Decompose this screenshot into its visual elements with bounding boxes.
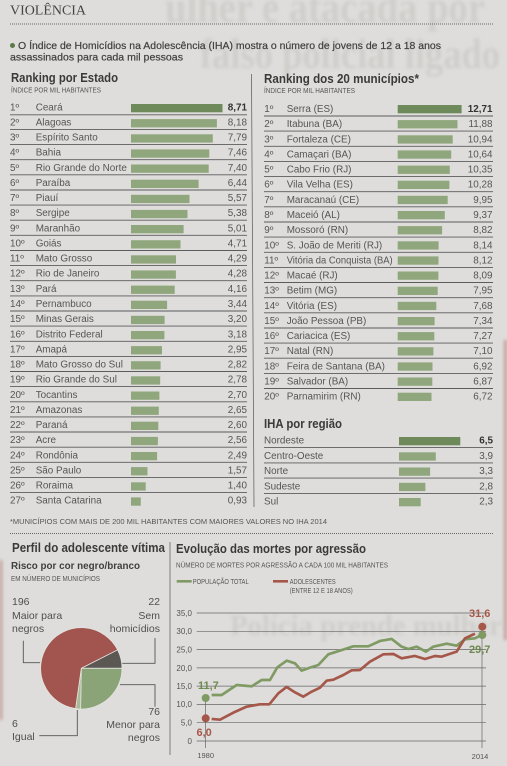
marker: 2014 população 29,7 xyxy=(469,631,490,656)
row: Amazonas: Amazonas xyxy=(36,405,82,416)
row: Distrito Federal: 3,18 xyxy=(228,329,247,340)
row: Roraima: 26º xyxy=(10,481,25,492)
subheading: índice por mil habitantes: ÍNDICE POR MIL HABITANTES xyxy=(264,86,355,95)
row: Espírito Santo: 3º xyxy=(10,133,19,144)
row: Betim: 13º xyxy=(264,286,279,297)
row: Nordeste: Nordeste xyxy=(264,436,305,447)
row: S. João de Meriti: 8,14 xyxy=(473,240,493,251)
row: Paraná xyxy=(10,420,247,432)
row: Fortaleza: 3º xyxy=(264,134,274,145)
row: Norte xyxy=(264,466,494,478)
row: Natal: Natal (RN) xyxy=(287,346,333,357)
row: Centro-Oeste xyxy=(264,451,494,463)
row: Rondônia: Rondônia xyxy=(36,450,78,461)
row: Ceará: Ceará xyxy=(36,102,63,113)
row: Feira de Santana: 6,92 xyxy=(473,361,492,372)
row: Acre xyxy=(10,435,247,447)
panel: evolução das mortes por agressão xyxy=(176,542,490,761)
row: Cabo Frio: 5º xyxy=(264,165,274,176)
row: Goiás xyxy=(10,238,247,250)
callout: 22 sem homicídios: homicídios xyxy=(110,623,160,635)
row: Vitória da Conquista xyxy=(264,255,493,267)
y axis labels: 30,0 xyxy=(176,627,193,636)
row: Centro-Oeste: 3,9 xyxy=(479,451,494,462)
row: Ceará xyxy=(10,102,247,115)
x axis labels: 1980 xyxy=(197,751,214,760)
row: São Paulo: 1,57 xyxy=(228,465,247,476)
intro text: assassinados para cada mil pessoas xyxy=(10,52,183,64)
x axis labels: 2014 xyxy=(472,752,488,761)
callout: 22 sem homicídios: Sem xyxy=(138,610,160,622)
row: Pará: 4,16 xyxy=(228,284,247,295)
row: S. João de Meriti: 10º xyxy=(264,240,279,251)
row: Sul: 2,3 xyxy=(479,497,494,508)
row: Itabuna: 11,88 xyxy=(469,119,493,130)
callout: 196 maior para negros: Maior para xyxy=(12,610,62,622)
callout: 6 igual: 6 xyxy=(12,718,18,730)
row: Amapá: 2,95 xyxy=(228,344,247,355)
row: Amapá: 17º xyxy=(10,344,25,355)
row: Ceará: 1º xyxy=(10,102,19,113)
row: Acre: Acre xyxy=(36,435,57,446)
row: Distrito Federal: Distrito Federal xyxy=(36,329,103,340)
row: Sergipe: 5,38 xyxy=(228,208,247,219)
row: Macaé: 12º xyxy=(264,270,279,282)
row: São Paulo xyxy=(10,465,247,477)
row: Rio Grande do Norte: 7,40 xyxy=(228,163,247,174)
marker: 2014 população 29,7: 29,7 xyxy=(469,644,490,656)
row: Bahia xyxy=(10,148,247,160)
row: Itabuna: Itabuna (BA) xyxy=(287,119,342,130)
row: Betim: 7,95 xyxy=(473,286,493,297)
heading: ranking por estado: Ranking por Estado xyxy=(11,71,118,85)
legend: (ENTRE 12 E 18 ANOS) xyxy=(290,588,353,595)
row: Cabo Frio xyxy=(264,165,493,177)
row: Macaé xyxy=(264,270,493,282)
row: Maracanaú: 9,95 xyxy=(473,195,493,206)
legend: ADOLESCENTES xyxy=(290,579,336,586)
row: Amazonas: 21º xyxy=(10,405,25,416)
row: Sergipe xyxy=(10,208,247,220)
row: Natal: 7,10 xyxy=(473,346,493,357)
row: Salvador: 19º xyxy=(264,376,279,388)
heading: IHA por região: IHA por região xyxy=(264,417,342,431)
text: Polícia prende mulher xyxy=(230,609,502,642)
row: Piauí: Piauí xyxy=(36,193,58,204)
row: Tocantins: Tocantins xyxy=(36,390,77,401)
row: Betim: Betim (MG) xyxy=(287,286,337,297)
callout: 196 maior para negros: negros xyxy=(12,623,44,635)
row: Alagoas: Alagoas xyxy=(36,117,71,128)
row: Amapá: Amapá xyxy=(36,344,67,355)
row: Rio Grande do Sul: 19º xyxy=(10,375,25,386)
row: Santa Catarina: 27º xyxy=(10,496,25,507)
row: Paraíba: 6º xyxy=(10,178,19,189)
row: São Paulo: 25º xyxy=(10,465,25,476)
line chart xyxy=(176,608,490,761)
marker: 1980 população 11,7 xyxy=(198,680,219,702)
row: Rio Grande do Sul: 2,78 xyxy=(228,375,247,386)
row: Pará: Pará xyxy=(36,284,57,295)
row: Vitória: 14º xyxy=(264,301,279,312)
title: VIOLÊNCIA xyxy=(10,2,87,18)
row: Pernambuco xyxy=(10,299,247,311)
row: Parnamirim xyxy=(264,392,492,403)
y axis labels: 0 xyxy=(188,737,193,746)
row: Roraima: Roraima xyxy=(36,481,74,492)
row: Rio de Janeiro: Rio de Janeiro xyxy=(36,269,100,280)
footnote: *MUNICÍPIOS COM MAIS DE 200 MIL HABITANTES COM MAIORES VALORES NO IHA 2014 xyxy=(10,517,327,526)
row: Pará: 13º xyxy=(10,284,25,295)
row: Maceió: 9,37 xyxy=(473,210,492,221)
row: Mato Grosso: Mato Grosso xyxy=(36,254,93,265)
row: Distrito Federal xyxy=(10,329,247,341)
row: Pernambuco: 3,44 xyxy=(228,299,247,310)
marker: 1980 adolescentes 6,0: 6,0 xyxy=(196,727,212,739)
row: Camaçari: 10,64 xyxy=(468,149,493,160)
row: Norte: Norte xyxy=(264,466,289,477)
row: Santa Catarina: Santa Catarina xyxy=(36,496,102,507)
x axis labels xyxy=(197,751,488,761)
row: Parnamirim: 20º xyxy=(264,392,279,403)
row: Vila Velha: 10,28 xyxy=(468,180,493,191)
row: Fortaleza: 10,94 xyxy=(468,134,493,145)
y axis labels: 35,0 xyxy=(176,609,193,618)
subheading: risco por cor: Risco por cor negro/branco xyxy=(11,560,140,572)
row: Parnamirim: 6,72 xyxy=(473,392,492,403)
callout: 76 menor para negros: 76 xyxy=(148,706,160,718)
y axis labels: 20,0 xyxy=(176,664,193,673)
row: Serra: 1º xyxy=(264,104,274,115)
row: Paraná: 22º xyxy=(10,420,25,431)
row: Paraíba: Paraíba xyxy=(36,178,71,189)
row: Maranhão: 9º xyxy=(10,223,19,234)
row: Maceió xyxy=(264,210,493,222)
row: Santa Catarina: 0,93 xyxy=(228,496,247,507)
row: Acre: 2,56 xyxy=(228,435,247,446)
row: Rio Grande do Sul xyxy=(10,375,247,387)
row: Cabo Frio: Cabo Frio (RJ) xyxy=(287,165,351,176)
unit note: EM NÚMERO DE MUNICÍPIOS xyxy=(11,574,100,583)
row: Maranhão: 5,01 xyxy=(228,223,247,234)
row: Itabuna: 2º xyxy=(264,119,274,130)
callout: 76 menor para negros: negros xyxy=(128,732,160,744)
row: Roraima: 1,40 xyxy=(228,481,247,492)
row: Nordeste: 6,5 xyxy=(479,436,494,447)
intro text xyxy=(10,39,441,64)
row: Sudeste: Sudeste xyxy=(264,481,301,492)
row: Salvador: Salvador (BA) xyxy=(287,376,348,388)
row: Paraíba xyxy=(10,178,247,190)
row: Minas Gerais: Minas Gerais xyxy=(36,314,94,325)
line: população total xyxy=(212,635,482,695)
row: Serra xyxy=(264,104,493,116)
subheading: índice por mil habitantes: ÍNDICE POR MIL HABITANTES xyxy=(11,86,101,94)
row: Cariacica: 16º xyxy=(264,331,279,342)
row: Bahia: 7,46 xyxy=(228,148,247,159)
row: Sul xyxy=(264,497,494,508)
row: Espírito Santo: 7,79 xyxy=(228,133,247,144)
row: Feira de Santana: Feira de Santana (BA) xyxy=(287,361,385,372)
row: João Pessoa: 7,34 xyxy=(473,316,493,327)
row: Goiás: 10º xyxy=(10,238,25,250)
row: Camaçari: Camaçari (BA) xyxy=(287,149,351,160)
row: Cariacica: 7,27 xyxy=(473,331,492,342)
row: Piauí xyxy=(10,193,247,205)
row: Roraima xyxy=(10,481,247,493)
row: João Pessoa xyxy=(264,316,493,328)
y axis labels: 5,0 xyxy=(181,718,193,728)
panel: ranking dos 20 municípios xyxy=(264,72,493,403)
row: Macaé: Macaé (RJ) xyxy=(287,270,338,282)
y axis labels: 10,0 xyxy=(176,700,193,709)
row: Rio de Janeiro: 12º xyxy=(10,269,25,280)
row: Maracanaú: Maracanaú (CE) xyxy=(287,195,359,206)
row: Mato Grosso: 11º xyxy=(10,254,24,265)
heading: perfil do adolescente vítima: Perfil do adolescente vítima xyxy=(12,541,166,555)
row: Tocantins: 2,70 xyxy=(228,390,247,401)
row: Alagoas: 8,18 xyxy=(228,117,247,128)
row: Vitória: 7,68 xyxy=(473,301,493,312)
row: Rio Grande do Norte: Rio Grande do Norte xyxy=(36,163,127,174)
row: Minas Gerais: 3,20 xyxy=(228,314,247,325)
marker: 2014 adolescentes 31,6 xyxy=(469,608,490,631)
legend xyxy=(177,577,353,595)
row: Santa Catarina xyxy=(10,496,247,507)
row: Piauí: 5,57 xyxy=(228,193,247,204)
row: Mato Grosso do Sul: Mato Grosso do Sul xyxy=(36,360,123,370)
callout: 22 sem homicídios: 22 xyxy=(148,596,160,608)
row: Itabuna xyxy=(264,119,493,131)
row: Amazonas: 2,65 xyxy=(228,405,247,416)
row: Rondônia: 2,49 xyxy=(228,450,247,461)
row: Maracanaú: 7º xyxy=(264,195,274,206)
row: Mato Grosso do Sul: 2,82 xyxy=(228,360,247,370)
row: Natal: 17º xyxy=(264,346,279,357)
row: Feira de Santana xyxy=(264,361,493,373)
row: Paraná: Paraná xyxy=(36,420,68,431)
row: Ceará: 8,71 xyxy=(228,102,247,113)
row: Mato Grosso do Sul xyxy=(10,360,247,372)
row: S. João de Meriti xyxy=(264,240,493,252)
row: Vitória da Conquista: 8,12 xyxy=(473,255,492,266)
row: Rio Grande do Sul: Rio Grande do Sul xyxy=(36,375,117,386)
row: Mossoró xyxy=(264,225,493,237)
row: Pará xyxy=(10,284,247,296)
legend: POPULAÇÃO TOTAL xyxy=(193,577,249,586)
row: Macaé: 8,09 xyxy=(473,270,493,282)
row: Piauí: 7º xyxy=(10,193,19,204)
y axis labels: 25,0 xyxy=(176,646,193,654)
row: Tocantins: 20º xyxy=(10,390,25,401)
row: Camaçari: 4º xyxy=(264,149,274,160)
panel: ranking por estado xyxy=(10,71,247,507)
y axis labels: 15,0 xyxy=(176,682,193,691)
row: Serra: 12,71 xyxy=(468,104,493,115)
row: Salvador xyxy=(264,376,493,388)
y axis labels xyxy=(176,609,193,746)
row: Betim xyxy=(264,286,493,298)
row: Norte: 3,3 xyxy=(479,466,494,477)
panel: IHA por região xyxy=(264,417,494,508)
row: Rio de Janeiro xyxy=(10,269,247,281)
row: Maracanaú xyxy=(264,195,493,207)
row: Serra: Serra (ES) xyxy=(287,104,333,115)
row: Pernambuco: Pernambuco xyxy=(36,299,92,310)
row: S. João de Meriti: S. João de Meriti (RJ) xyxy=(287,240,382,251)
callout: 196 maior para negros: 196 xyxy=(12,596,30,608)
row: Vila Velha: Vila Velha (ES) xyxy=(287,180,353,191)
row: Alagoas: 2º xyxy=(10,117,19,128)
row: Maceió: Maceió (AL) xyxy=(287,210,340,221)
row: Amazonas xyxy=(10,405,247,417)
row: Fortaleza xyxy=(264,134,493,146)
row: Vila Velha xyxy=(264,180,493,192)
panel: perfil do adolescente vítima xyxy=(11,541,166,744)
callout: 6 igual xyxy=(12,710,77,743)
row: Vitória: Vitória (ES) xyxy=(287,301,337,312)
intro text: O Índice de Homicídios na Adolescência (IHA) mostra o número de jovens de 12 a 18 anos xyxy=(18,39,441,52)
pie chart xyxy=(41,628,122,709)
row: Centro-Oeste: Centro-Oeste xyxy=(264,451,324,462)
row: João Pessoa: 15º xyxy=(264,316,279,327)
callout: 76 menor para negros: Menor para xyxy=(106,719,160,731)
row: Vitória xyxy=(264,301,493,313)
row: Fortaleza: Fortaleza (CE) xyxy=(287,134,351,145)
row: Maranhão xyxy=(10,223,247,235)
row: São Paulo: São Paulo xyxy=(36,465,82,476)
row: Paraíba: 6,44 xyxy=(228,178,247,189)
marker: 2014 adolescentes 31,6: 31,6 xyxy=(469,608,490,620)
row: Bahia: 4º xyxy=(10,148,19,159)
row: Mossoró: 8,82 xyxy=(473,225,492,236)
row: Nordeste xyxy=(264,436,494,448)
callout: 6 igual: Igual xyxy=(12,731,35,743)
row: Tocantins xyxy=(10,390,247,402)
line: adolescentes xyxy=(212,634,475,720)
marker: 1980 população 11,7: 11,7 xyxy=(198,680,219,692)
row: João Pessoa: João Pessoa (PB) xyxy=(287,316,366,327)
row: Espírito Santo xyxy=(10,133,247,145)
row: Sergipe: Sergipe xyxy=(36,208,70,219)
row: Espírito Santo: Espírito Santo xyxy=(36,133,98,144)
row: Rio de Janeiro: 4,28 xyxy=(228,269,247,280)
row: Bahia: Bahia xyxy=(36,148,61,159)
row: Vitória da Conquista: Vitória da Conquista (BA) xyxy=(287,255,393,266)
row: Paraná: 2,60 xyxy=(228,420,247,431)
subheading: número de mortes: NÚMERO DE MORTES POR AGRESSÃO A CADA 100 MIL HABITANTES xyxy=(176,561,388,570)
row: Rondônia xyxy=(10,450,247,462)
row: Cabo Frio: 10,35 xyxy=(468,165,493,176)
row: Rio Grande do Norte xyxy=(10,163,247,175)
row: Salvador: 6,87 xyxy=(473,376,492,388)
heading: ranking dos 20 municípios: Ranking dos 20 municípios* xyxy=(264,72,419,86)
row: Mato Grosso do Sul: 18º xyxy=(10,360,25,370)
row: Mato Grosso xyxy=(10,254,247,266)
row: Mato Grosso: 4,29 xyxy=(228,254,247,265)
row: Maranhão: Maranhão xyxy=(36,223,81,234)
row: Sergipe: 8º xyxy=(10,208,19,219)
callout: 196 maior para negros xyxy=(12,596,62,663)
row: Goiás: 4,71 xyxy=(228,238,247,250)
row: Vila Velha: 6º xyxy=(264,180,274,191)
callout: 22 sem homicídios xyxy=(110,596,160,663)
heading: evolução das mortes: Evolução das mortes por agressão xyxy=(176,542,366,556)
row: Distrito Federal: 16º xyxy=(10,329,25,340)
row: Cariacica xyxy=(264,331,493,343)
row: Camaçari xyxy=(264,149,493,161)
marker: 1980 adolescentes 6,0 xyxy=(196,714,212,739)
row: Minas Gerais xyxy=(10,314,247,326)
row: Alagoas xyxy=(10,117,247,129)
row: Parnamirim: Parnamirim (RN) xyxy=(287,392,361,403)
row: Cariacica: Cariacica (ES) xyxy=(287,331,350,342)
row: Rio Grande do Norte: 5º xyxy=(10,163,19,174)
row: Mossoró: Mossoró (RN) xyxy=(287,225,348,236)
row: Mossoró: 9º xyxy=(264,225,274,236)
row: Pernambuco: 14º xyxy=(10,299,25,310)
row: Rondônia: 24º xyxy=(10,450,25,461)
row: Minas Gerais: 15º xyxy=(10,314,25,325)
row: Goiás: Goiás xyxy=(36,238,62,250)
row: Sul: Sul xyxy=(264,497,278,508)
callout: 76 menor para negros xyxy=(106,685,160,744)
row: Maceió: 8º xyxy=(264,210,274,221)
row: Natal xyxy=(264,346,493,358)
row: Vitória da Conquista: 11º xyxy=(264,255,279,266)
row: Acre: 23º xyxy=(10,435,25,446)
row: Feira de Santana: 18º xyxy=(264,361,279,372)
row: Amapá xyxy=(10,344,247,356)
row: Sudeste xyxy=(264,481,494,493)
row: Sudeste: 2,8 xyxy=(479,481,494,492)
